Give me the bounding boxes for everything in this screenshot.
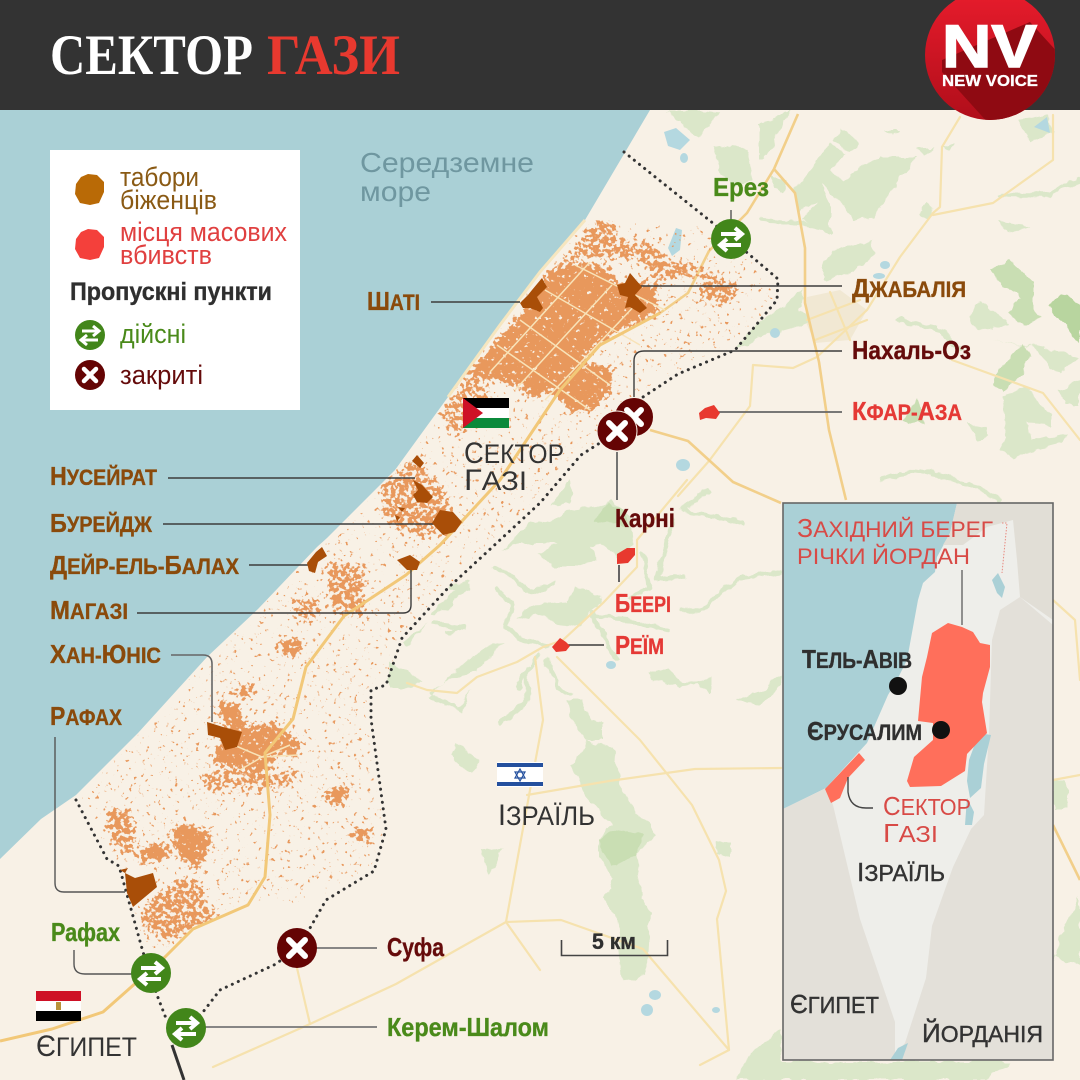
inset city dots <box>889 677 907 695</box>
inset Jordan <box>891 597 1053 1060</box>
flag: Egypt <box>36 991 81 1021</box>
map label: Israel: ІЗРАЇЛЬ <box>498 799 595 832</box>
legend label: massacre sites: місця масових <box>120 217 287 247</box>
inset leader lines <box>961 570 963 625</box>
camp: Nuseirat <box>395 455 433 522</box>
open checkpoint labels: Керем-Шалом <box>387 1012 549 1042</box>
logo: NV New Voice <box>925 0 1055 120</box>
inset labels: РІЧКИ ЙОРДАН <box>797 544 970 569</box>
sea <box>0 110 650 859</box>
title <box>50 24 400 87</box>
inset labels <box>797 513 993 848</box>
camp labels <box>50 273 966 731</box>
legend label: closed: закриті <box>120 360 203 390</box>
site: Kfar Aza <box>699 405 720 420</box>
inset labels: СЕКТОР <box>883 791 971 821</box>
panel: inset map: ЙОРДАНІЯ <box>922 1018 1043 1048</box>
map labels: sea <box>360 147 534 207</box>
title: ГАЗИ <box>267 24 400 87</box>
logo: NV New Voice: NV <box>942 13 1037 80</box>
panel: inset map: ЄРУСАЛИМ <box>807 716 922 746</box>
coastal pale line <box>448 220 585 397</box>
camp labels: НУСЕЙРАТ <box>50 461 158 491</box>
camp: Maghazi <box>397 555 420 570</box>
green land areas <box>390 110 1080 1080</box>
open checkpoint labels: Ерез <box>713 172 769 202</box>
camp: Khan Younis <box>207 722 242 750</box>
logo: NV New Voice: NEW VOICE <box>942 73 1038 90</box>
map label: Sector Gaza: СЕКТОР <box>464 437 564 470</box>
scale bar <box>562 929 668 956</box>
camp labels: БУРЕЙДЖ <box>50 508 152 538</box>
Gaza strip built-up areas <box>76 210 778 957</box>
Gaza main road <box>0 313 660 1041</box>
legend icon: massacre sites <box>75 229 104 260</box>
legend icon: closed <box>75 360 105 390</box>
flag: Palestine <box>463 398 509 428</box>
panel: inset map: ТЕЛЬ-АВІВ <box>802 644 912 674</box>
massacre site labels: РЕЇМ <box>615 630 664 660</box>
camp labels: ШАТІ <box>367 286 420 316</box>
Gaza City street grid <box>222 262 665 770</box>
massacre site labels: КФАР-АЗА <box>852 396 962 426</box>
closed checkpoint labels: Нахаль-Оз <box>852 335 971 365</box>
title: СЕКТОР <box>50 24 253 87</box>
header bar <box>0 0 1080 110</box>
inset water bodies <box>890 573 1005 1060</box>
camp: Bureij <box>432 510 462 535</box>
border: dotted Gaza perimeter <box>76 152 778 1028</box>
Sderot built-up <box>805 290 867 343</box>
inset labels: ЗАХІДНИЙ БЕРЕГ <box>797 513 993 543</box>
site: Beeri <box>617 548 635 564</box>
panel: legend <box>50 150 300 410</box>
map labels: sea: Середземне <box>360 147 534 178</box>
checkpoint icon: Karni <box>597 411 637 451</box>
closed checkpoint labels: Суфа <box>387 932 444 962</box>
legend heading: Пропускні пункти <box>70 278 272 306</box>
water ponds <box>606 117 1050 1016</box>
panel: inset map: ЄГИПЕТ <box>790 989 879 1019</box>
map labels: sea: море <box>360 176 431 207</box>
camp labels: ДЕЙР-ЕЛЬ-БАЛАХ <box>50 550 239 580</box>
massacre sites <box>552 405 720 652</box>
panel: inset map: ІЗРАЇЛЬ <box>857 857 945 887</box>
inset sea <box>783 503 957 809</box>
legend label: open: дійсні <box>120 319 186 349</box>
checkpoint icon: Sufa <box>277 928 317 968</box>
scale bar: 5 км <box>592 929 636 954</box>
legend icon: open <box>75 320 105 350</box>
legend label: massacre sites <box>120 217 287 270</box>
legend icon: refugee camps <box>75 174 104 205</box>
inset Gaza Strip <box>825 753 865 803</box>
open checkpoint labels <box>51 172 769 1042</box>
inset labels: ГАЗІ <box>883 818 938 848</box>
legend label: refugee camps <box>120 162 217 215</box>
map label: Sector Gaza: ГАЗІ <box>464 464 527 497</box>
legend label: massacre sites: вбивств <box>120 240 212 270</box>
checkpoint icon: Nahal Oz <box>614 398 654 436</box>
checkpoint icon: Kerem Shalom <box>166 1008 206 1048</box>
dendritic wadis <box>433 180 1080 723</box>
legend label: refugee camps: табори <box>120 162 199 192</box>
closed checkpoint labels <box>387 335 971 962</box>
checkpoint icon: Erez <box>711 219 751 259</box>
massacre site labels: БЕЕРІ <box>615 588 671 618</box>
closed checkpoint labels: Карні <box>615 503 675 533</box>
camp labels: ХАН-ЮНІС <box>50 639 161 669</box>
flag: Israel <box>497 762 543 787</box>
map label: Sector Gaza <box>464 437 564 497</box>
checkpoint icon: Rafah <box>131 953 171 993</box>
refugee camps <box>120 273 647 907</box>
camp labels: РАФАХ <box>50 701 122 731</box>
inset border <box>783 503 1053 1060</box>
border: Egypt solid line <box>172 1045 184 1080</box>
panel: inset map <box>783 503 1053 1060</box>
leader lines <box>55 210 842 1027</box>
roads <box>213 115 1080 1067</box>
open checkpoint labels: Рафах <box>51 917 120 947</box>
inset Lebanon and Syria <box>943 503 1053 620</box>
camp: Deir al-Balah <box>307 547 327 573</box>
legend label: refugee camps: біженців <box>120 185 217 215</box>
camp: Jabalia <box>617 273 647 313</box>
camp: Rafah <box>120 868 157 907</box>
massacre site labels <box>615 396 962 660</box>
inset dotted border line <box>1002 523 1007 573</box>
site: Reim <box>552 638 570 652</box>
inset West Bank <box>907 623 990 787</box>
camp: Shati <box>520 278 547 312</box>
camp labels: МАГАЗІ <box>50 595 128 625</box>
camp labels: ДЖАБАЛІЯ <box>852 273 966 303</box>
inset Egypt <box>783 788 895 1060</box>
map label: Egypt: ЄГИПЕТ <box>36 1030 137 1063</box>
